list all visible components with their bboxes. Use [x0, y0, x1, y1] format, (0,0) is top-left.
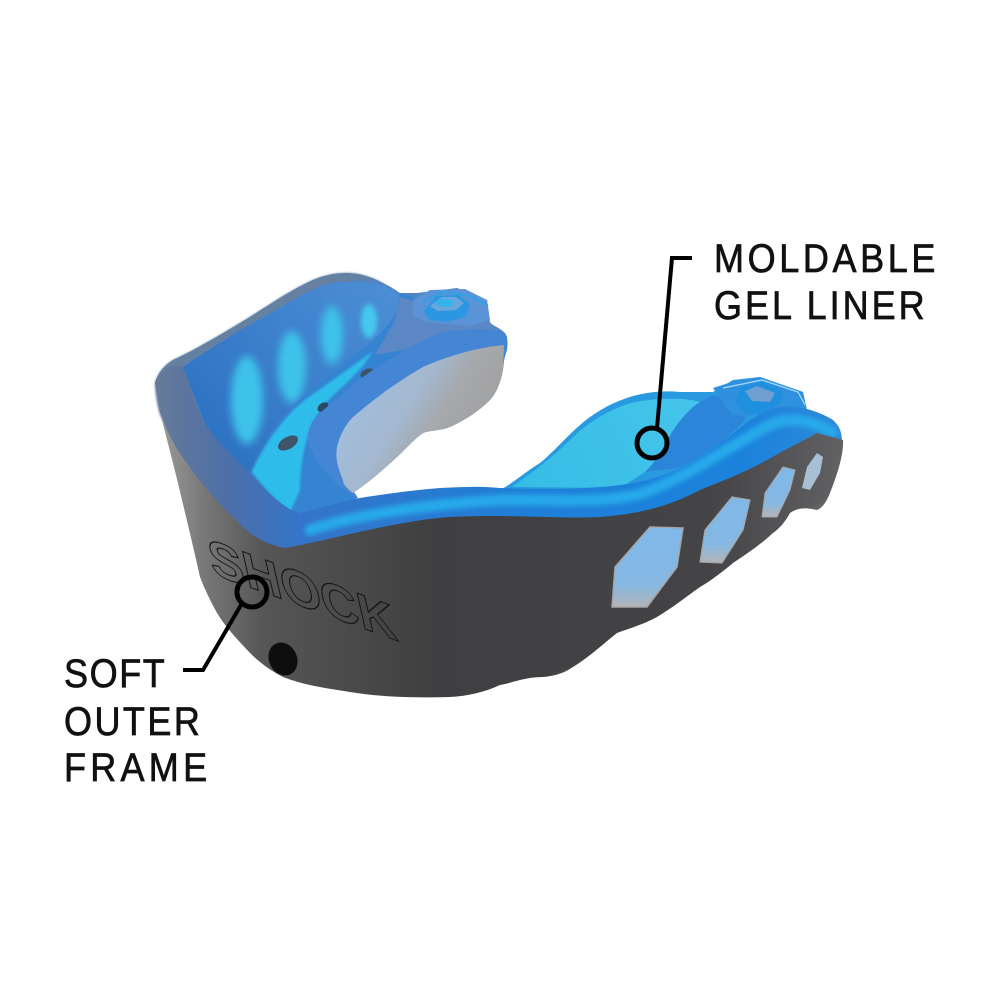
vent holes: [275, 366, 375, 454]
window 1: [612, 527, 683, 607]
left hex nut: [413, 289, 490, 326]
mouthguard illustration: [155, 270, 850, 720]
back tray: inner wall with cushions: [183, 282, 399, 473]
window 4: [802, 453, 823, 490]
moldable gel liner: [500, 377, 807, 490]
cushion 1: [231, 356, 263, 444]
right hex nut: [713, 377, 806, 416]
back tray: bowl floor: [250, 293, 503, 520]
callout: moldable gel liner: [637, 237, 935, 458]
leader line: [657, 258, 692, 428]
label: [64, 652, 207, 790]
label: FRAME: [64, 746, 207, 790]
embossed brand text: SHOCK: [202, 527, 402, 653]
rim highlight: [310, 420, 832, 530]
cushion 4: [361, 304, 377, 338]
label: OUTER: [64, 700, 200, 744]
soft outer frame body: [160, 412, 850, 720]
gray pad: [336, 345, 504, 493]
window 2: [700, 497, 750, 563]
marker ring: [237, 577, 267, 607]
label: SOFT: [64, 652, 165, 696]
leader line: [183, 605, 241, 670]
cushion 2: [278, 331, 306, 403]
cushion 3: [321, 306, 343, 364]
marker ring: [637, 428, 667, 458]
front rim: [155, 366, 842, 565]
mouth breathing hole: [263, 638, 303, 680]
inner lip: [308, 329, 508, 498]
callout: soft outer frame: [64, 577, 267, 790]
window 3: [762, 467, 795, 517]
label: GEL LINER: [714, 284, 925, 328]
label: [714, 237, 935, 328]
back tray: outer shell: [155, 273, 507, 520]
label: MOLDABLE: [714, 237, 935, 281]
